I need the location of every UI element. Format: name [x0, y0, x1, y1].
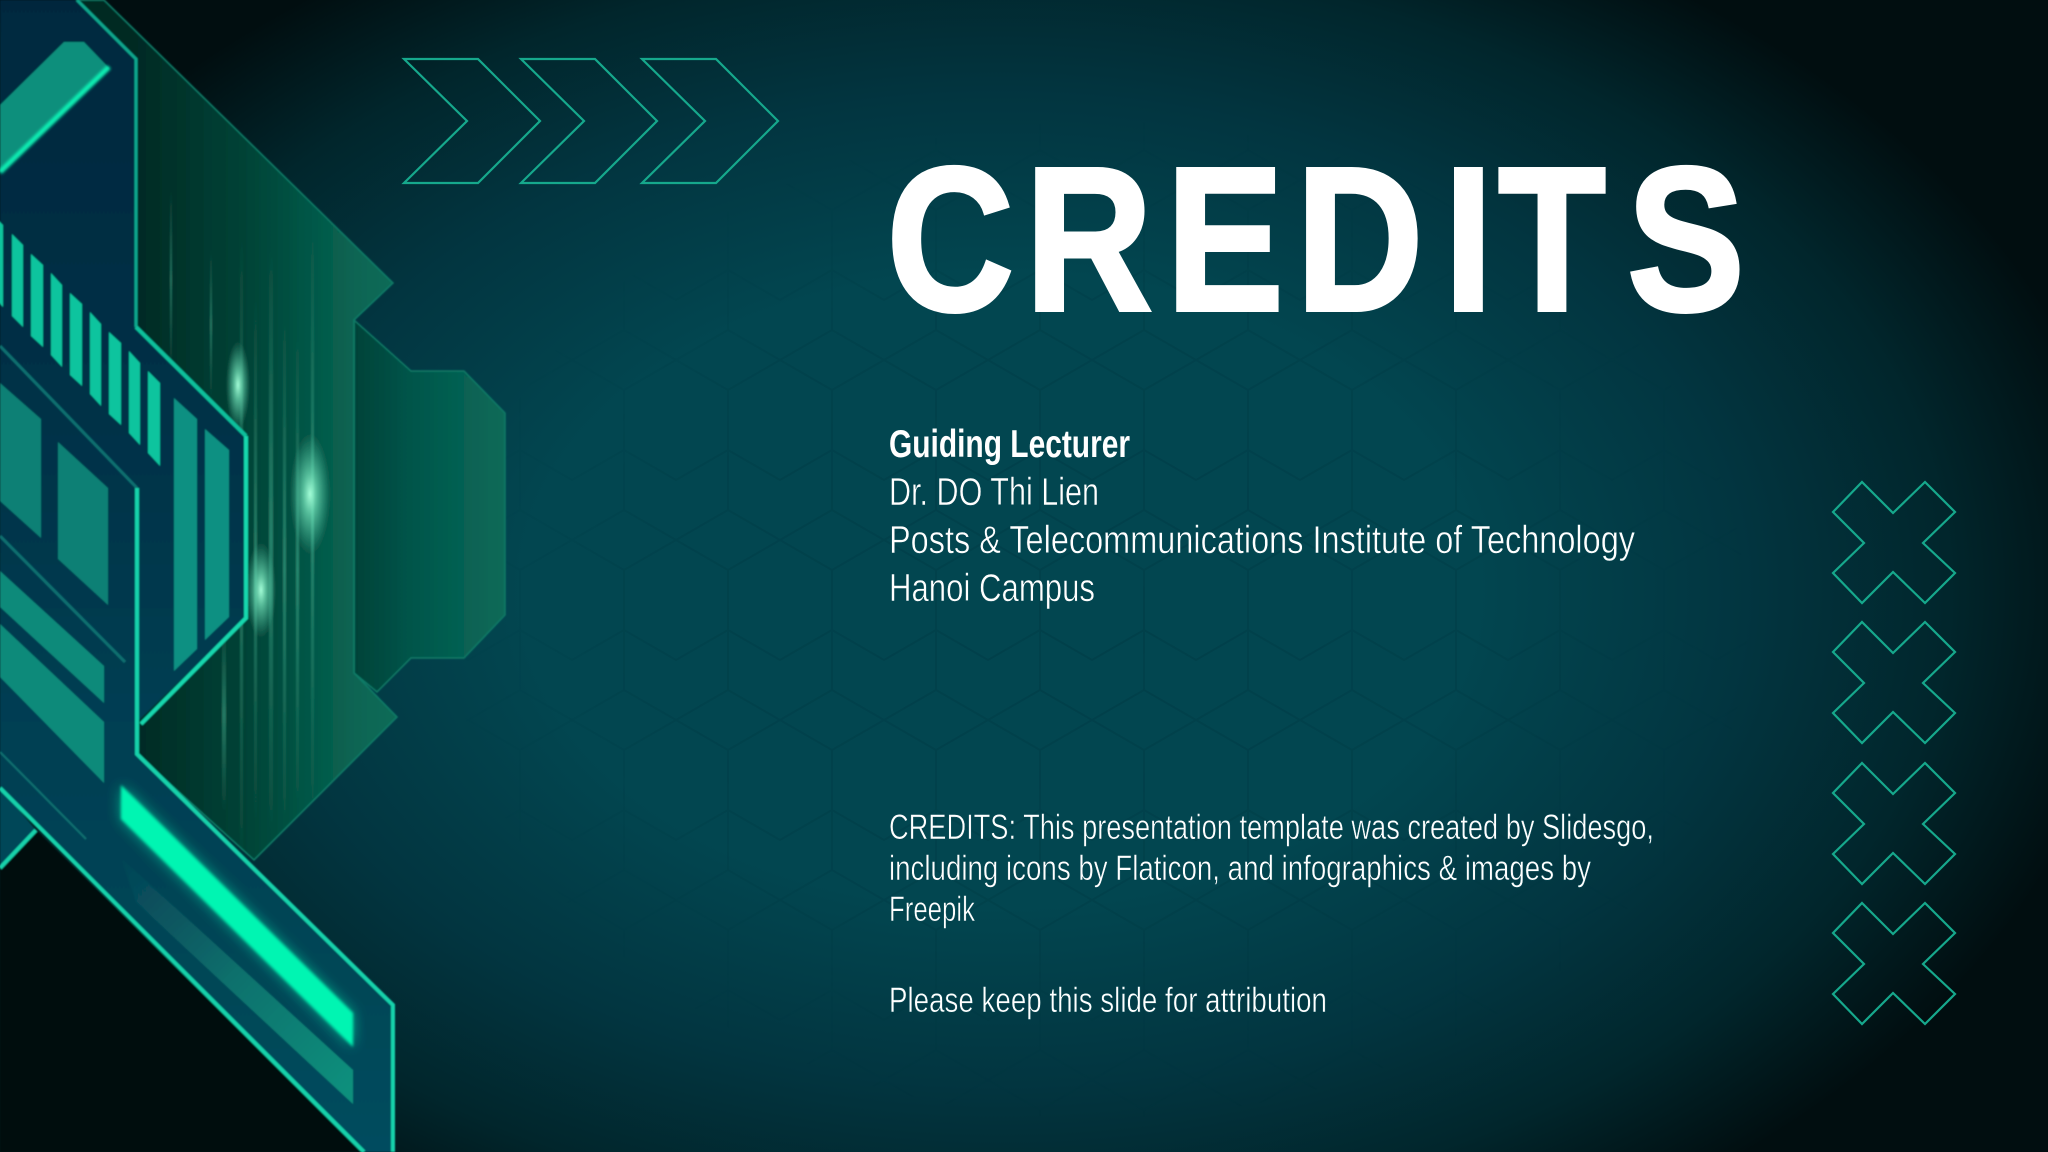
bottom left shadow	[0, 830, 364, 1152]
bright circuit lines	[0, 0, 393, 1152]
title: CREDITS	[887, 125, 1745, 354]
square blocks	[0, 383, 108, 605]
guiding lecturer text block: Guiding Lecturer	[889, 423, 1130, 466]
top left block with bright edge	[0, 42, 109, 172]
dark circuit panel	[0, 0, 393, 1152]
chevron arrows	[404, 59, 778, 183]
bright glowing bar	[121, 785, 353, 1047]
dim lower bar	[121, 858, 353, 1104]
attribution text block	[889, 808, 1654, 1020]
stripe bars	[0, 214, 160, 466]
hexagon background pattern	[450, 120, 1750, 1120]
glowing lights	[226, 341, 330, 638]
diagonal blocks	[0, 571, 104, 783]
guiding lecturer text block: Dr. DO Thi Lien	[889, 471, 1099, 514]
front green panel	[77, 0, 397, 860]
rear green panel	[354, 320, 505, 692]
cross icons	[1833, 482, 1955, 1024]
guiding lecturer text block: Posts & Telecommunications Institute of Technology	[889, 519, 1635, 562]
guiding lecturer text block: Hanoi Campus	[889, 567, 1095, 610]
lower left small triangle	[0, 788, 36, 868]
column blocks	[174, 398, 229, 671]
dim circuit lines	[0, 346, 137, 839]
attribution text block: Please keep this slide for attribution	[889, 981, 1327, 1020]
guiding lecturer text block	[889, 423, 1635, 610]
light streaks	[170, 190, 314, 860]
attribution text block: Freepik	[889, 890, 975, 929]
attribution text block: CREDITS: This presentation template was created by Slidesgo,	[889, 808, 1654, 847]
attribution text block: including icons by Flaticon, and infographics & images by	[889, 849, 1591, 888]
left circuit artwork	[0, 0, 505, 1152]
